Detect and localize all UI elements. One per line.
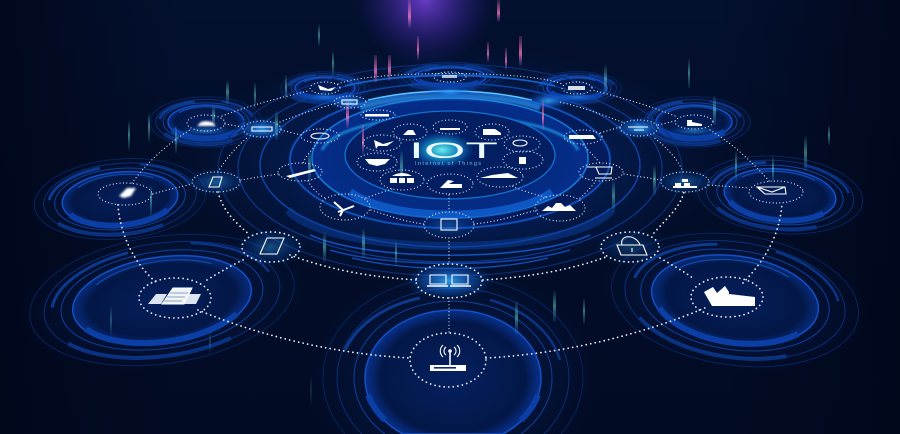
node: top right xyxy=(562,82,592,94)
icon: shopping cart xyxy=(587,167,612,178)
icon: people xyxy=(542,203,576,211)
icon: bus xyxy=(687,120,702,126)
icon: plane xyxy=(318,85,336,91)
icon: chip xyxy=(441,219,457,230)
node: lock xyxy=(601,232,659,262)
glow: upper highlights xyxy=(176,87,724,300)
node: bus xyxy=(675,115,713,129)
node: truck xyxy=(564,130,602,144)
node: heart xyxy=(357,153,397,171)
ring: upper left cloud xyxy=(145,95,267,149)
inner icon nodes xyxy=(357,120,543,194)
node: umbrella xyxy=(380,170,424,190)
ring: top right node xyxy=(529,70,625,106)
icon: device xyxy=(628,127,648,130)
big ring: right factory xyxy=(592,212,878,388)
icon: truck xyxy=(569,135,596,139)
icon: mobile device xyxy=(119,188,136,198)
ring: right mail xyxy=(687,146,873,244)
centre glow behind title xyxy=(410,132,474,168)
node: car xyxy=(477,167,523,187)
node: cloud xyxy=(187,115,225,131)
node: top centre xyxy=(434,72,466,82)
node: upper secondary left xyxy=(334,96,366,108)
icon: factory xyxy=(704,286,755,306)
node: mobile xyxy=(98,183,152,205)
ring: left mobile xyxy=(24,148,216,250)
network: middle dotted ring xyxy=(153,102,749,280)
node: chip xyxy=(424,212,474,238)
node: cart xyxy=(579,163,623,181)
icon: small device xyxy=(568,86,585,90)
icon: router antenna xyxy=(430,345,466,371)
icon: buildings xyxy=(148,288,201,304)
icon: strip xyxy=(365,114,389,116)
icon: phone xyxy=(209,177,222,187)
ring: upper right bus xyxy=(633,95,755,149)
icon: monitor xyxy=(252,127,272,131)
icon: drone xyxy=(334,202,354,216)
node: network blocks xyxy=(661,172,709,192)
icon: pen xyxy=(286,169,316,178)
node: upper right glow xyxy=(620,120,658,136)
node: phone xyxy=(192,172,240,192)
node: tablet xyxy=(242,232,300,262)
node: buildings xyxy=(139,278,211,318)
node: drone xyxy=(320,194,370,220)
node: upper left glow xyxy=(243,121,281,137)
icon: network blocks xyxy=(673,179,697,188)
icon: eye xyxy=(311,133,329,139)
big ring: bottom antenna xyxy=(308,266,598,434)
vertical light streaks xyxy=(110,0,830,405)
subtitle: Internet of Things: Internet of Things xyxy=(415,161,481,167)
node: factory xyxy=(691,277,763,317)
icon: top centre device xyxy=(442,75,457,78)
node: tv xyxy=(475,124,509,140)
node: cargo xyxy=(427,174,473,194)
central ring structure xyxy=(218,64,682,276)
node: top plane xyxy=(310,82,340,94)
icon: camera xyxy=(342,100,357,104)
icon: lock xyxy=(617,237,647,255)
node: envelope xyxy=(749,181,803,203)
network: outer dotted ring xyxy=(118,74,782,358)
node: laptops xyxy=(416,264,482,298)
icon: envelope xyxy=(757,187,786,194)
big ring: left buildings xyxy=(10,212,314,388)
node: document xyxy=(503,151,543,169)
node: people xyxy=(535,195,585,221)
title: IOT: IOT xyxy=(409,138,498,163)
node: plane xyxy=(363,135,401,151)
node: wifi xyxy=(393,124,427,140)
node: ship xyxy=(433,120,467,134)
node: search xyxy=(504,136,540,152)
icon: laptops xyxy=(427,275,471,286)
network: inner dotted ring and spokes xyxy=(303,143,600,333)
icon: tablet xyxy=(260,238,284,254)
ring: top left plane xyxy=(277,70,373,106)
icon: cloud xyxy=(197,121,216,126)
node: eye xyxy=(301,129,339,143)
node: plane strip xyxy=(361,110,395,120)
ring: top centre node xyxy=(392,61,508,93)
node: antenna xyxy=(410,333,486,387)
node: tool xyxy=(278,163,322,181)
